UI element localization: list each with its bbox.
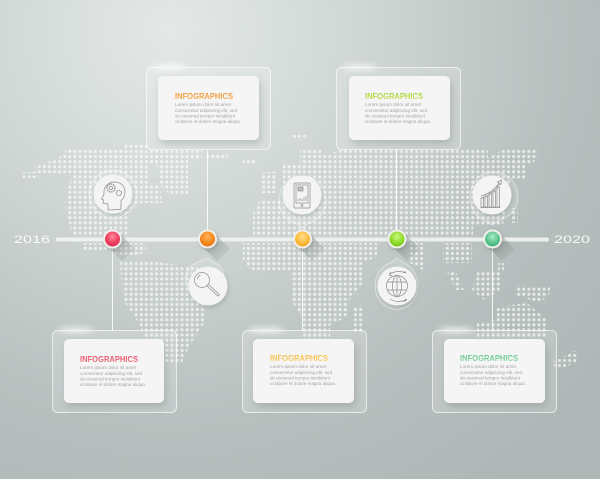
timeline node 4 green [388,230,420,261]
timeline node 2 orange [198,230,230,261]
text block: ut labore et dolore magna aliqua. [460,381,526,386]
timeline bar [56,238,549,242]
connector lines [112,149,492,331]
text block: ut labore et dolore magna aliqua. [365,119,431,124]
text block: ut labore et dolore magna aliqua. [270,381,336,386]
panel: bottom card 2 [242,328,366,412]
icon: globe with arrows [375,258,418,310]
text block: do eiusmod tempor incididunt [80,376,141,382]
icon: rising bar chart [470,172,518,225]
glass frame [52,330,176,412]
text block: Lorem ipsum dolor sit amet [175,102,232,107]
text block [460,364,526,386]
text block: consectetur adipiscing elit, sed [460,370,522,375]
glass frame [432,330,556,412]
text block: consectetur adipiscing elit, sed [80,371,142,376]
timeline node 1 red [103,230,135,261]
text block [175,102,241,124]
panel: top card 1 [146,65,270,150]
text block [365,102,431,124]
heading: INFOGRAPHICS [80,354,138,364]
heading: INFOGRAPHICS [175,91,233,101]
year label 2016: 2016 [14,234,50,246]
text block: do eiusmod tempor incididunt [365,114,426,118]
text block: ut labore et dolore magna aliqua. [80,382,146,387]
icon: magnifying glass [186,258,228,306]
text block: Lorem ipsum dolor sit amet [460,364,517,369]
panel: bottom card 1 [52,328,176,412]
glass frame [242,330,366,412]
white card [349,76,450,140]
timeline node 5 teal [483,230,515,261]
text block: ut labore et dolore magna aliqua. [175,119,241,124]
text block: consectetur adipiscing elit, sed [365,108,427,113]
year label 2020: 2020 [554,234,590,246]
text block: consectetur adipiscing elit, sed [175,108,237,113]
white card [158,76,259,140]
text block [270,364,336,386]
text block: do eiusmod tempor incididunt [460,376,521,380]
text block: do eiusmod tempor incididunt [270,376,331,380]
panel: bottom card 3 [432,328,556,412]
text block: Lorem ipsum dolor sit amet [80,365,137,370]
white card [253,339,354,403]
dotted world map [22,135,578,370]
timeline node 3 yellow [293,230,325,261]
white card [444,339,545,403]
heading: INFOGRAPHICS [460,353,518,363]
white card [64,339,164,403]
text block: do eiusmod tempor incididunt [175,114,236,118]
glass frame [146,68,270,150]
glass frame [336,68,460,150]
text block: consectetur adipiscing elit, sed [270,370,332,375]
icon: head with gears [89,170,137,219]
heading: INFOGRAPHICS [365,91,423,101]
heading: INFOGRAPHICS [270,353,328,363]
text block: Lorem ipsum dolor sit amet [270,364,327,369]
text block: Lorem ipsum dolor sit amet [365,102,422,107]
icon: tablet with charts [279,176,326,228]
text block [80,365,146,387]
panel: top card 2 [336,65,460,150]
